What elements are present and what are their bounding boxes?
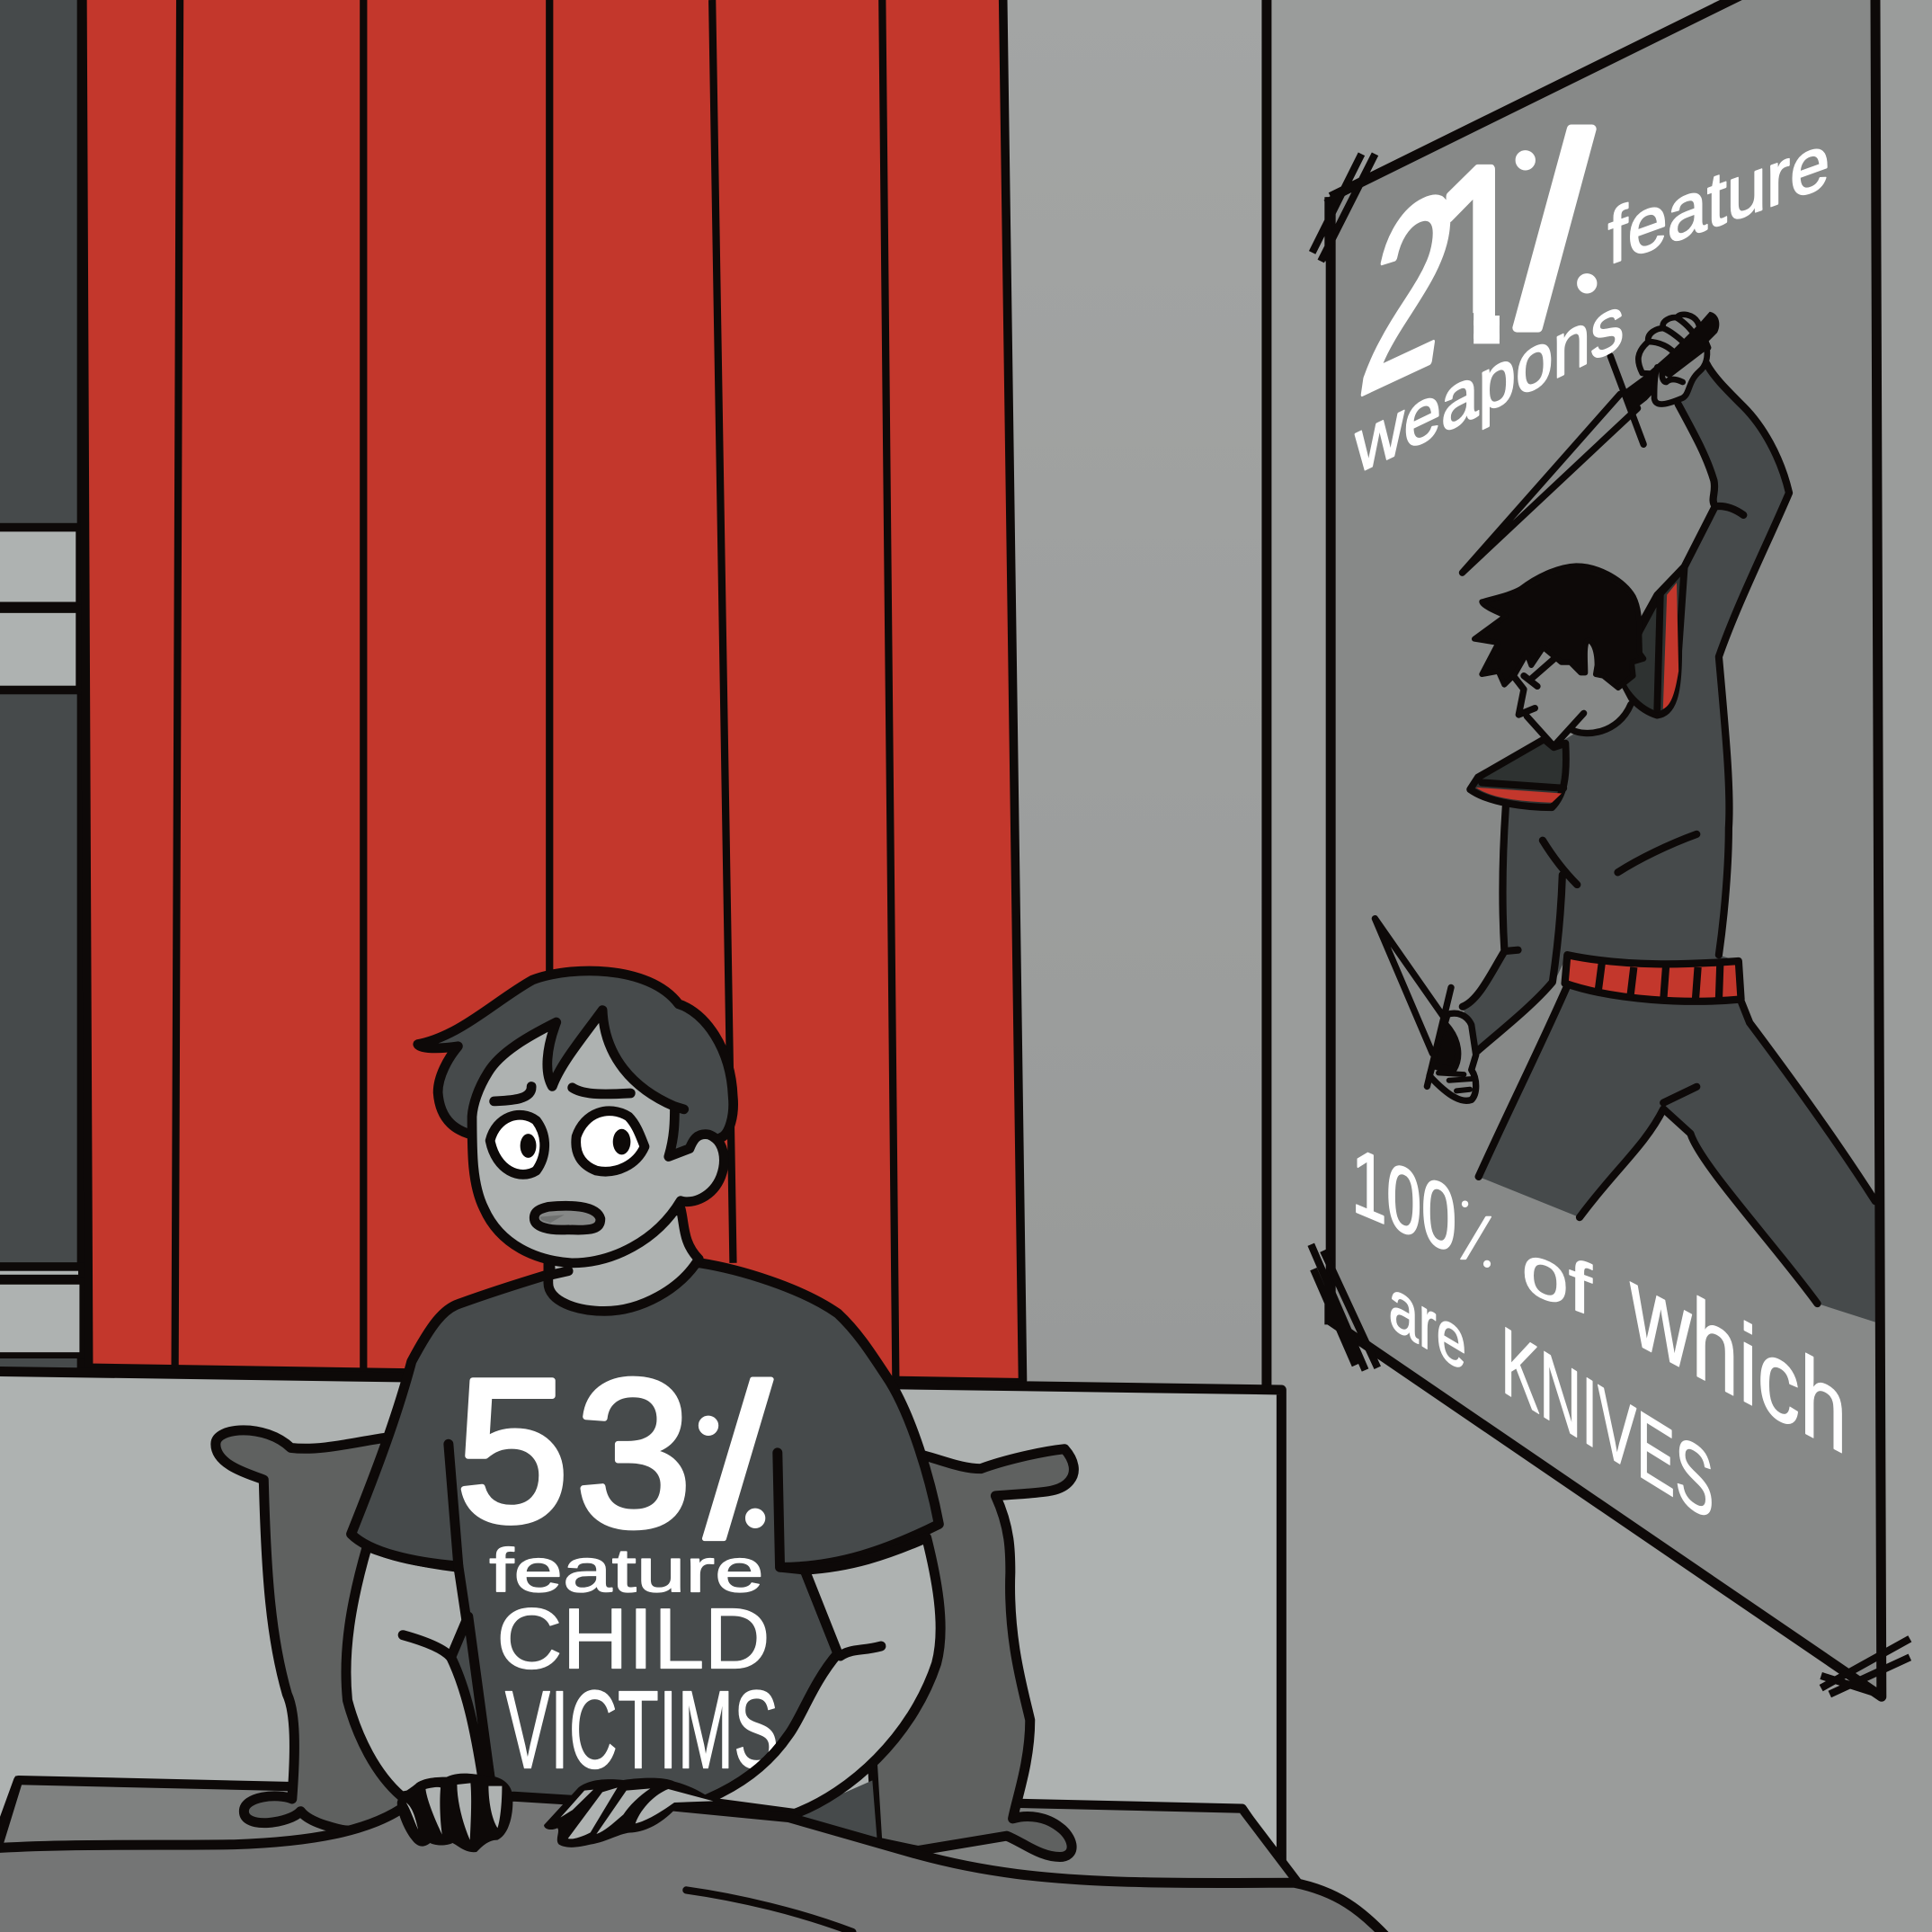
shirt stat: 53% feature child victims: VICTIMS <box>505 1669 779 1793</box>
right arm <box>702 1537 940 1813</box>
poster stat: 100% of which are knives: • <box>1482 1250 1491 1279</box>
right hand <box>544 1778 717 1847</box>
attacker raised knife and short sleeve <box>1462 356 1643 807</box>
eyebrows <box>494 1086 684 1109</box>
shirt stat: 53% feature child victims: • <box>743 1477 769 1559</box>
left hand <box>397 1774 512 1852</box>
left eye <box>490 1115 545 1174</box>
poster border <box>1331 0 1882 1696</box>
mattress <box>0 1780 1300 1932</box>
attacker head <box>1474 565 1643 746</box>
attacker outline <box>1463 363 1875 1304</box>
red curtain <box>83 0 1023 1383</box>
poster <box>1311 0 1910 1696</box>
poster stat: 21% feature weapons: / <box>1517 80 1593 383</box>
poster stat: 21% feature weapons <box>1354 124 1828 471</box>
tape top left <box>1313 154 1376 262</box>
attacker body <box>1463 363 1875 1322</box>
face <box>472 1011 724 1263</box>
shirt stat: 53% feature child victims <box>456 1336 779 1793</box>
poster sheet <box>1331 0 1882 1696</box>
tape bottom right <box>1821 1639 1910 1694</box>
poster stat: 21% feature weapons: weapons <box>1355 277 1624 492</box>
shirt below right arm <box>788 1780 877 1842</box>
window on the left <box>0 0 83 1374</box>
poster stat: 100% of which are knives: of <box>1522 1226 1592 1331</box>
attacker eye mark <box>1524 658 1555 686</box>
right pillow <box>862 1449 1073 1856</box>
head <box>418 971 734 1311</box>
poster stat: 21% feature weapons: feature <box>1608 116 1830 281</box>
attacker face <box>1513 654 1631 746</box>
left arm <box>346 1546 486 1796</box>
poster stat: 100% of which are knives: are <box>1389 1259 1466 1388</box>
attacker lower dagger and hand <box>1375 919 1476 1100</box>
attacker belt <box>1565 955 1741 1002</box>
poster stat: 21% feature weapons: 2 <box>1348 130 1471 450</box>
shirt stat: 53% feature child victims: CHILD <box>496 1591 770 1687</box>
right eye <box>576 1111 645 1171</box>
shirt stat: 53% feature child victims: • <box>696 1384 721 1466</box>
boy <box>346 971 940 1842</box>
attacker hair <box>1474 565 1643 688</box>
dagger blade <box>1462 394 1638 573</box>
attacker raised fist <box>1621 312 1719 411</box>
poster stat: 100% of which are knives <box>1351 1126 1847 1543</box>
neck <box>548 1209 699 1311</box>
t-shirt <box>352 1263 939 1818</box>
poster stat: 100% of which are knives: which <box>1630 1240 1847 1479</box>
poster attacker figure <box>1375 312 1875 1322</box>
headboard <box>0 1371 1281 1866</box>
shirt stat: 53% feature child victims: / <box>705 1340 771 1582</box>
poster stat: 21% feature weapons: • <box>1574 243 1600 325</box>
poster stat: 21% feature weapons: • <box>1512 120 1538 201</box>
attacker short sleeve <box>1470 739 1566 807</box>
shirt stat: 53% feature child victims: 3 <box>575 1337 692 1571</box>
wall corner line <box>1263 0 1270 1390</box>
shirt stat: 53% feature child victims: 5 <box>456 1336 569 1563</box>
poster stat: 100% of which are knives: • <box>1461 1190 1469 1218</box>
shirt stat: 53% feature child victims: feature <box>489 1536 764 1606</box>
attacker face lines <box>1513 676 1631 746</box>
blanket <box>0 1796 1390 1932</box>
poster stat: 100% of which are knives: KNIVES <box>1500 1305 1714 1543</box>
left pillow <box>216 1430 413 1830</box>
attacker sleeve stripe <box>1620 566 1685 715</box>
tape bottom left <box>1311 1244 1377 1370</box>
hair <box>418 971 734 1161</box>
mouth <box>534 1206 601 1230</box>
poster stat: 100% of which are knives: / <box>1457 1206 1494 1270</box>
chin mark <box>550 1267 568 1275</box>
poster stat: 100% of which are knives: 100 <box>1351 1126 1456 1274</box>
dagger guard <box>1610 356 1643 444</box>
poster stat: 21% feature weapons: 1 <box>1433 117 1529 392</box>
